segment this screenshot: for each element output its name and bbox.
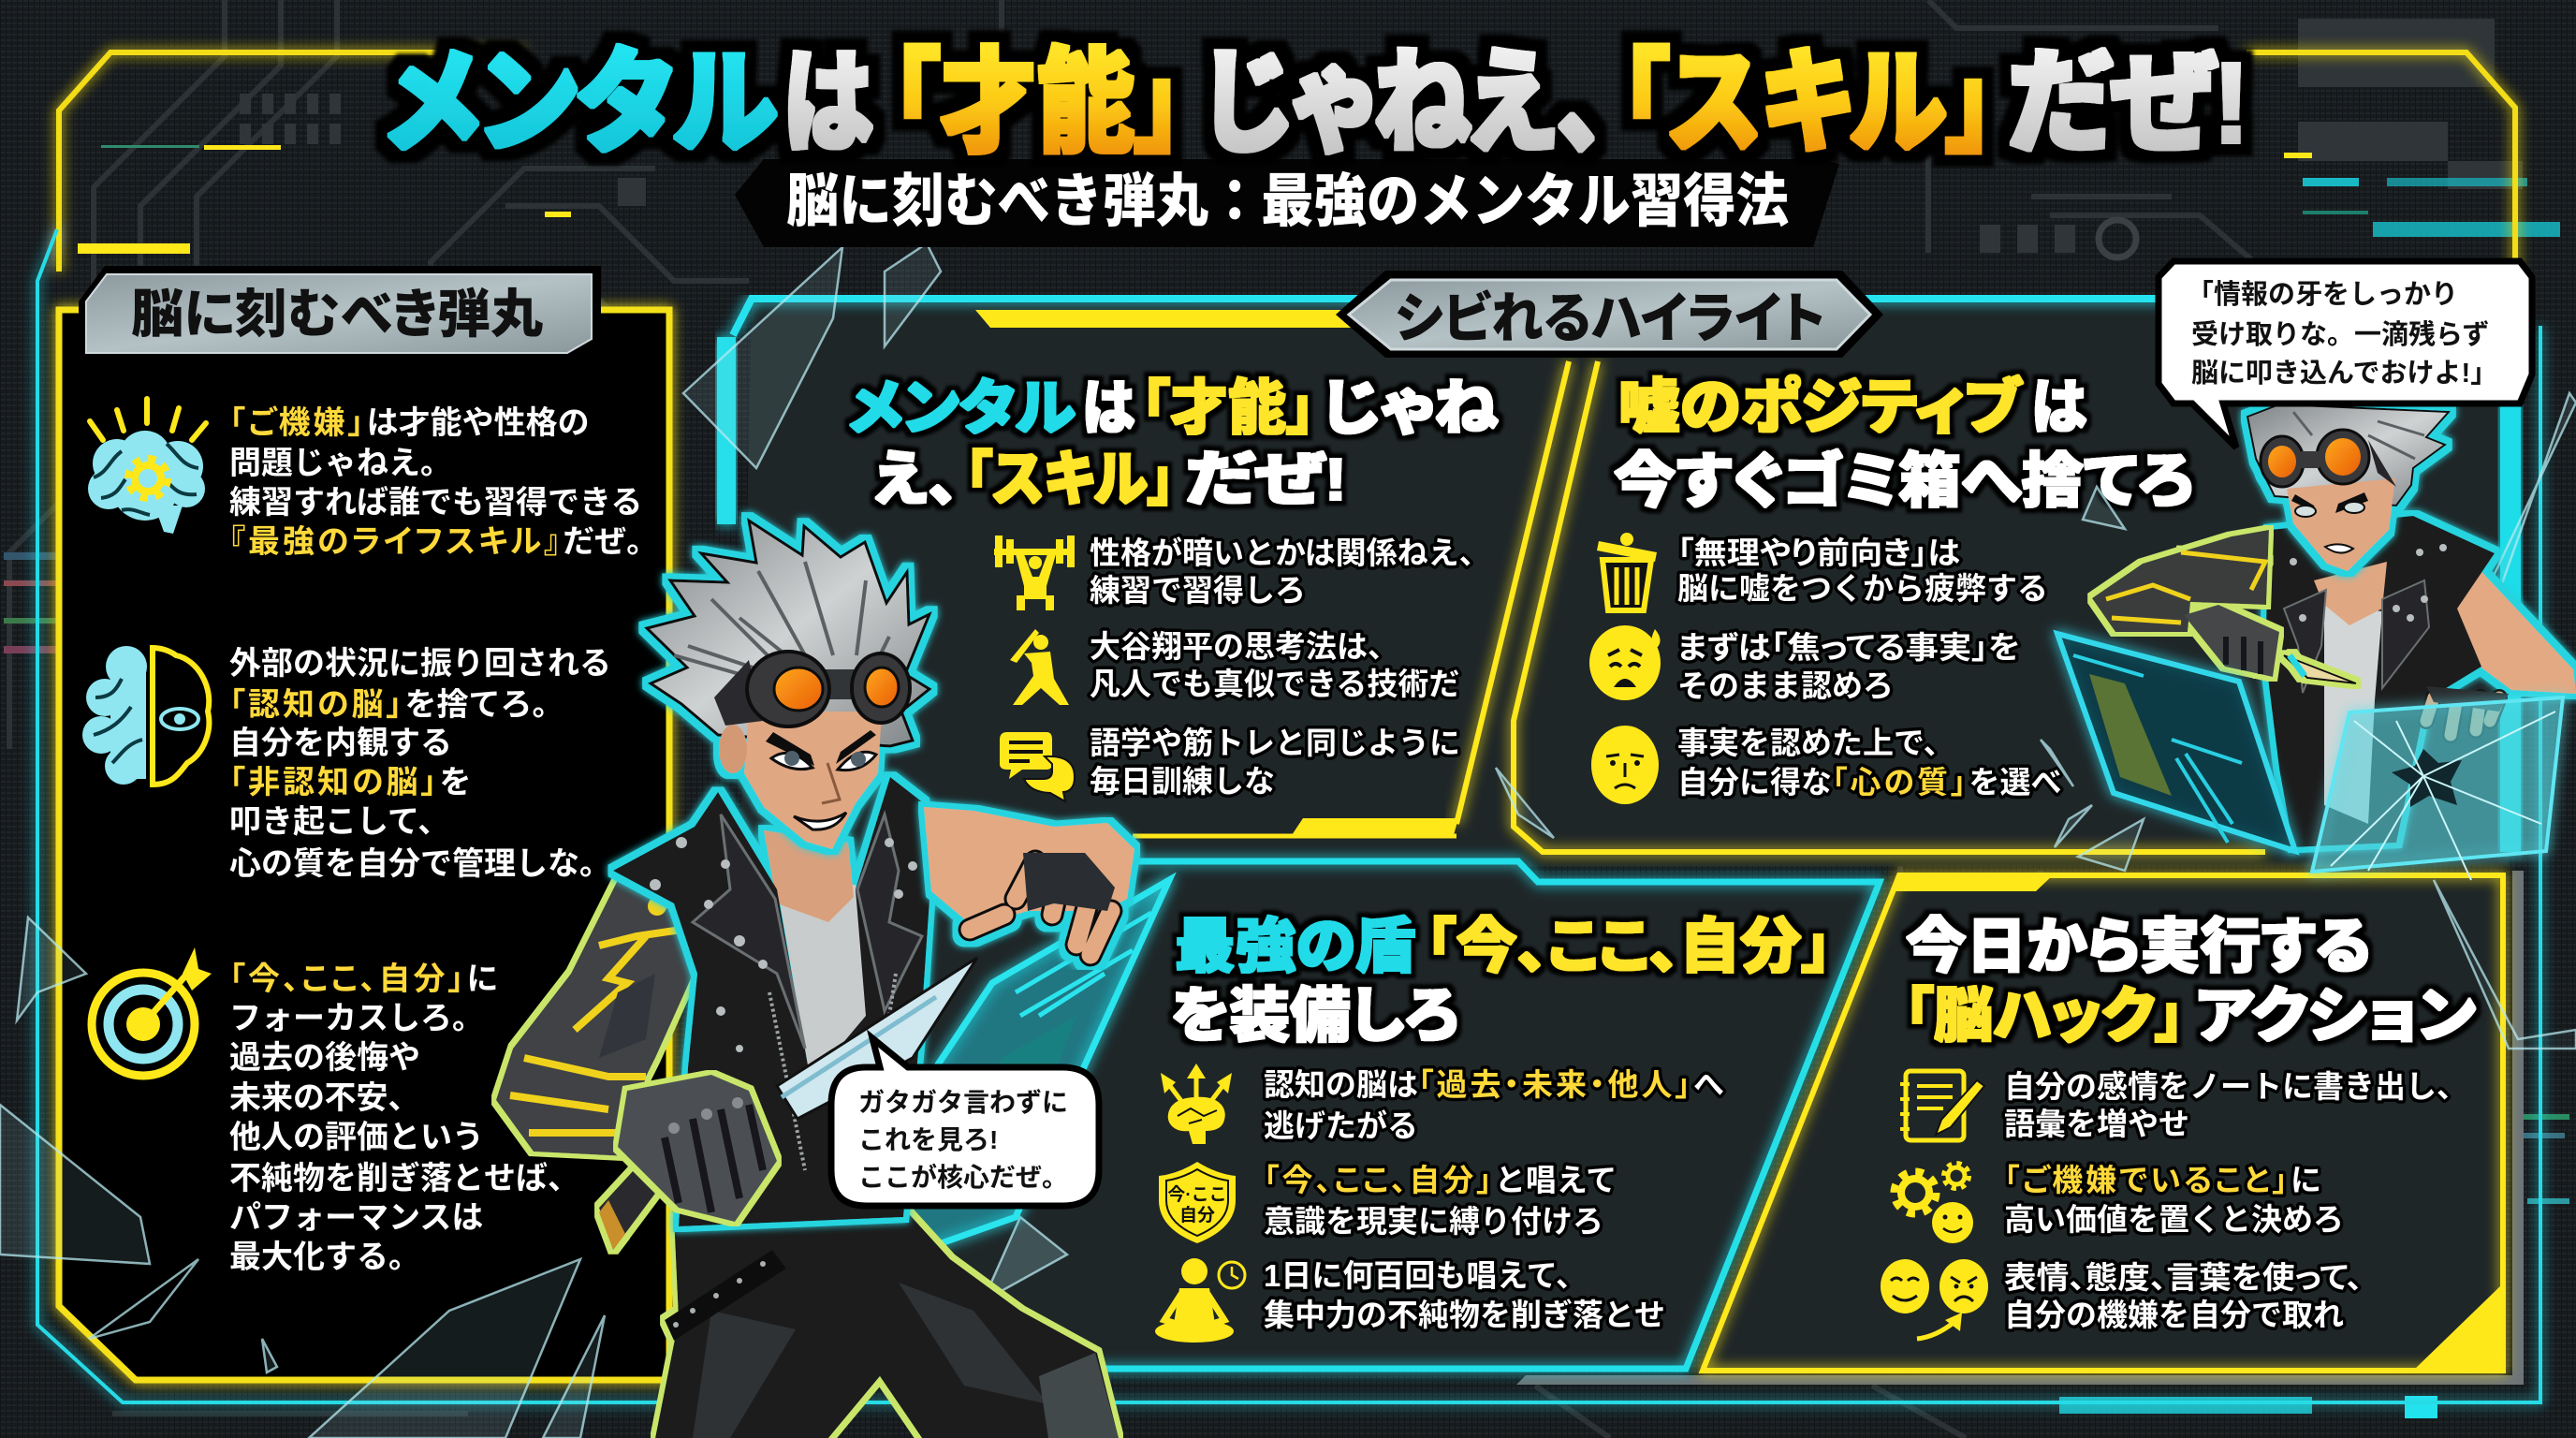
icon: target [92,947,212,1076]
main title [386,39,2249,167]
heading 3: 最強の盾 [1175,913,1416,980]
heading 4: アクション [2195,982,2476,1049]
text: item 3-2: 「今、ここ、自分」と唱えて [1264,1163,1617,1197]
tag: highlights heading: シビれるハイライト [1395,288,1825,349]
body and legs [655,1208,1119,1438]
icon: meditation [1155,1258,1245,1343]
heading 3: を装備しろ [1171,982,1458,1049]
heading 2: は [2031,374,2086,441]
tag: bullets heading [79,266,601,361]
subtitle banner: 脳に刻むべき弾丸：最強のメンタル習得法 [786,169,1789,234]
text: item 3-1: 認知の脳は「過去・未来・他人」へ [1264,1067,1724,1102]
tag: bullets heading: 脳に刻むべき弾丸 [131,285,543,344]
gauntlet fist [618,1075,777,1222]
text: block 3: 不純物を削ぎ落とせば、 [229,1161,579,1196]
text: item 3-2 [1264,1163,1617,1239]
text: item 3-1 [1264,1067,1724,1143]
icon: shield: 今·ここ [1167,1184,1227,1205]
icon: notebook [1900,1071,1984,1140]
text: item 2-3 [1677,726,2062,800]
text: block 2: 自分を内観する [229,726,452,761]
subtitle banner [735,159,1839,247]
icon: two faces [1881,1259,1988,1339]
right character [2057,404,2576,880]
mechanical arm [2092,530,2356,683]
text: item 2-1: 脳に嘘をつくから疲弊する [1677,571,2048,606]
text: item 4-2: 「ご機嫌でいること」に [2004,1163,2321,1197]
text: item 4-1 [2004,1069,2467,1141]
text: block 1: 練習すれば誰でも習得できる [229,485,642,521]
text: item 4-2 [2004,1163,2344,1237]
panel 4: brain hack actions [1703,873,2503,1371]
text: block 1: 『最強のライフスキル』だぜ。 [229,524,658,560]
text: item 1-1: 性格が暗いとかは関係ねえ、 [1090,536,1490,570]
text: block 3: パフォーマンスは [229,1200,483,1236]
text: block 3: 「今、ここ、自分」に [229,961,499,997]
tablet: left hologram [782,880,1169,1299]
main title: だぜ! [2006,39,2249,167]
body [2265,516,2576,847]
main title: 「スキル」 [1620,39,1995,167]
panel: main highlight background [717,299,2521,1372]
left character [496,521,1169,1438]
icon: brain with arrows [1161,1064,1232,1144]
heading 4: 今日から実行する [1906,913,2371,980]
text: item 4-2: 高い価値を置くと決めろ [2004,1202,2344,1237]
heading 1: メンタル [848,374,1076,442]
text: item 2-2: そのまま認めろ [1677,668,1894,703]
text: block 3: 他人の評価という [229,1120,484,1155]
icon: gears and smile [1895,1164,1973,1243]
icon: trash can [1597,533,1657,610]
text: block 3: 未来の不安、 [229,1080,404,1116]
text: item 2-3: 自分に得な「心の質」を選べ [1677,765,2062,800]
text: item 1-3 [1090,726,1460,799]
heading 2: 嘘のポジティブ [1618,374,2024,441]
text: item 1-1: 練習で習得しろ [1090,573,1306,608]
icon: shield: 自分 [1179,1205,1215,1225]
text: block 3 [229,961,579,1275]
text: block 1: 「ご機嫌」は才能や性格の [229,405,590,441]
heading 1: 「スキル」 [965,446,1175,513]
panel 1: mental is skill [848,361,1569,836]
text: item 4-3: 表情、態度、言葉を使って、 [2004,1260,2363,1295]
speech bubble: top right: 脳に叩き込んでおけよ!」 [2191,359,2497,389]
panel 2: false positivity [1514,361,2265,852]
text: block 1 [229,405,658,560]
text: item 4-3: 自分の機嫌を自分で取れ [2004,1298,2344,1332]
icon: chat bubbles [1000,732,1075,801]
tablet: right hologram [2057,634,2295,851]
text: block 1: 問題じゃねえ。 [229,446,452,481]
right arm and hand [924,807,1134,955]
heading 1: え、 [874,446,959,513]
text: block 3: 過去の後悔や [229,1040,420,1076]
text: item 2-3: 事実を認めた上で、 [1677,726,1954,760]
shattered glass panel [2312,697,2563,880]
text: item 3-3: 集中力の不純物を削ぎ落とせ [1264,1298,1665,1332]
panel: left bullets [59,266,669,1380]
text: block 2: 心の質を自分で管理しな。 [229,846,611,882]
text: item 3-3: 1日に何百回も唱えて、 [1264,1258,1587,1293]
icon: calm face [1591,726,1659,804]
torso with jacket [613,777,931,1226]
text: block 3: フォーカスしろ。 [229,1001,484,1036]
hand gripping glass [2426,686,2509,735]
text: item 1-3: 語学や筋トレと同じように [1090,726,1460,760]
heading 2: 今すぐゴミ箱へ捨てろ [1614,448,2193,515]
heading 3 [1171,913,1832,1049]
text: item 2-2: まずは「焦ってる事実」を [1677,630,2020,665]
heading 4 [1904,913,2476,1049]
text: item 4-3 [2004,1260,2363,1332]
text: item 1-1 [1090,536,1490,608]
speech bubble: top right: 受け取りな。一滴残らず [2191,319,2489,350]
text: item 2-1 [1677,536,2048,606]
text: item 1-3: 毎日訓練しな [1090,764,1275,799]
heading 1 [848,374,1499,513]
icon: weightlifter [994,536,1075,610]
speech bubble: center: これを見ろ! [858,1125,998,1154]
text: block 2: 「非認知の脳」を [229,765,472,800]
icon: brain with gear [88,399,206,534]
heading 3: 「今、ここ、自分」 [1426,913,1832,980]
knife [777,958,977,1119]
text: item 1-2: 凡人でも真似できる技術だ [1090,667,1459,701]
grey strips [1516,871,2524,1385]
text: item 1-2: 大谷翔平の思考法は、 [1090,629,1398,664]
speech bubble: center [831,1038,1099,1206]
icon: shield [1159,1162,1236,1243]
head [647,521,929,849]
text: block 3: 最大化する。 [229,1240,420,1275]
text: item 3-1: 逃げたがる [1264,1108,1418,1143]
main title: 「才能」 [891,39,1183,167]
speech bubble: top right: 「情報の牙をしっかり [2187,279,2458,310]
heading 1: だぜ! [1184,446,1348,513]
text: block 2: 叩き起こして、 [229,804,449,840]
speech bubble: center: ガタガタ言わずに [858,1088,1068,1117]
heading 1: は [1082,374,1134,442]
heading 2 [1614,374,2193,515]
text: item 4-1: 自分の感情をノートに書き出し、 [2004,1069,2467,1104]
arm with mechanical sleeve [496,880,697,1250]
speech bubble: center: ここが核心だぜ。 [858,1162,1068,1192]
main title: じゃねえ、 [1203,39,1605,167]
icon: batter [1010,629,1069,705]
heading 1: じゃね [1322,374,1499,442]
text: item 3-3 [1264,1258,1665,1332]
tag: highlights heading [1336,271,1883,358]
head [2247,404,2449,571]
heading 4: 「脳ハック」 [1904,982,2185,1049]
text: block 2 [229,646,611,882]
main title: メンタル [386,39,777,167]
text: block 2: 「認知の脳」を捨てろ。 [229,687,564,723]
main title: は [783,39,872,167]
text: block 2: 外部の状況に振り回される [229,646,611,682]
speech bubble: top right [2159,261,2532,448]
text: item 1-2 [1090,629,1459,701]
icon: sweating face [1589,625,1661,700]
text: item 2-1: 「無理やり前向き」は [1677,536,1960,570]
heading 1: 「才能」 [1141,374,1315,442]
icon: two brain halves [82,646,209,785]
text: item 4-1: 語彙を増やせ [2004,1107,2189,1141]
text: item 2-2 [1677,630,2020,703]
panel 3: the shield [812,861,1880,1369]
text: item 3-2: 意識を現実に縛り付けろ [1264,1204,1603,1239]
